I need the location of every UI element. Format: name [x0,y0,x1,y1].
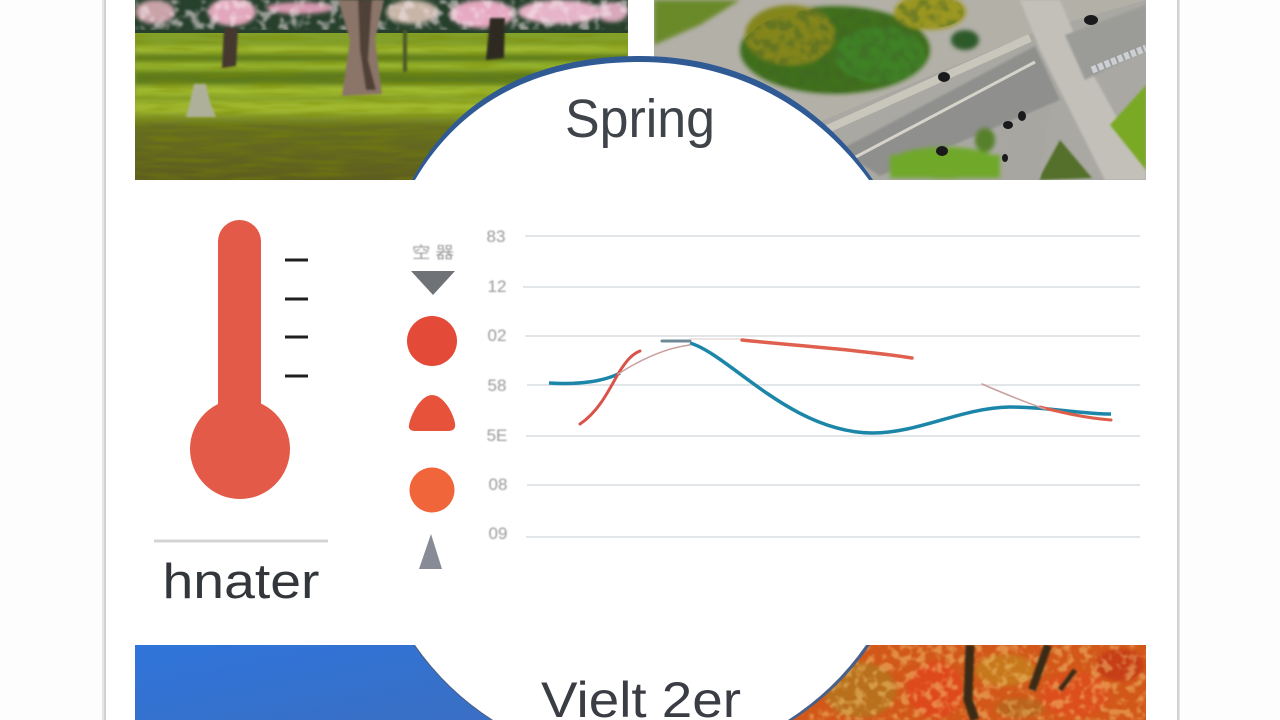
chart axis labels: 5E [487,426,507,445]
chart axis labels [487,227,507,543]
legend icon: red dome [409,395,455,431]
chart axis labels: 83 [487,227,505,246]
photo: spring park with blossom trees [135,0,628,180]
chart series: red segments [580,339,1111,424]
icon: thermometer [190,220,290,499]
legend column [407,244,457,569]
legend icon: orange circle [410,468,454,512]
chart axis labels: 08 [489,475,507,494]
thermometer tick marks [285,260,308,376]
legend icon: red circle [407,316,457,366]
legend title: 空 器 [412,244,454,262]
thermometer divider [154,540,328,542]
photo: autumn forest [790,645,1146,720]
chart axis labels: 02 [488,326,506,345]
chart axis labels: 09 [489,524,507,543]
heading: Spring: Spring [565,89,715,149]
white central shape: lower [414,645,870,720]
photo: blue sky panel [135,645,495,720]
chart grid lines [523,236,1140,537]
chart axis labels: 58 [488,376,506,395]
chart axis labels: 12 [488,277,506,296]
thermometer label: hnater [162,555,320,609]
chart series: teal line [549,343,1111,433]
line chart [487,227,1140,543]
white central shape: upper [412,56,873,180]
legend icon: down triangle [411,271,455,295]
legend icon: up triangle [419,534,442,569]
photo: aerial road junction [654,0,1146,180]
